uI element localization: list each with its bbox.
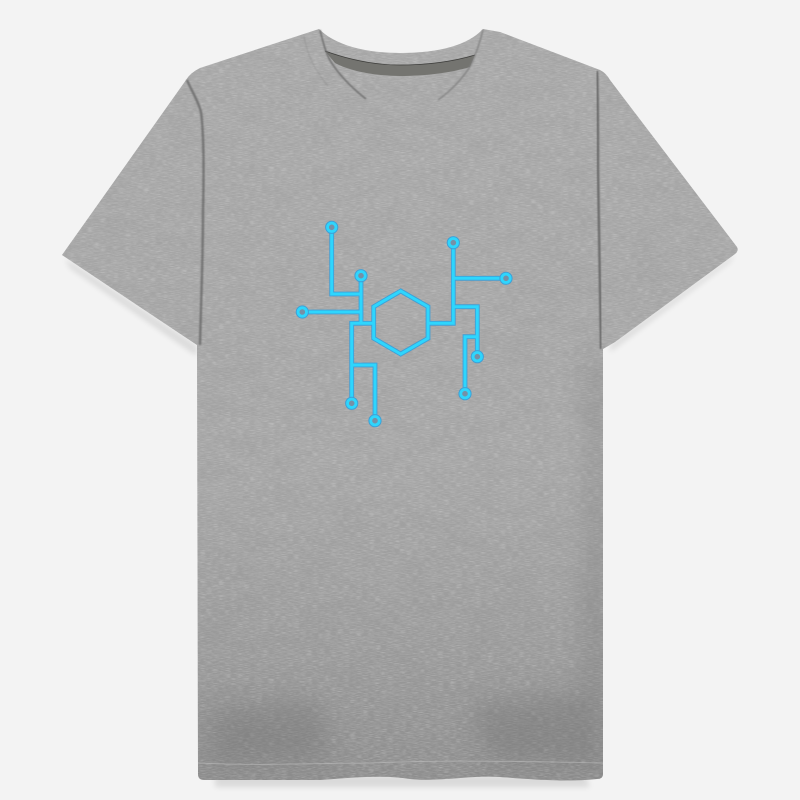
right sleeve seam xyxy=(597,71,601,349)
circuit core lines xyxy=(302,227,506,421)
inner back neck band xyxy=(325,51,475,76)
circuit print xyxy=(298,223,510,425)
hem shading xyxy=(210,360,604,770)
circuit nodes xyxy=(298,223,510,425)
left front rib line xyxy=(320,30,366,99)
right front rib line xyxy=(438,30,483,100)
collar: neck band and inner label tape xyxy=(304,30,483,100)
drop shadow under shirt xyxy=(65,254,735,787)
circuit node halos xyxy=(298,223,510,425)
outer rib shading xyxy=(304,36,328,86)
fabric heather texture xyxy=(197,43,576,460)
left sleeve seam xyxy=(187,80,204,345)
circuit outline glow xyxy=(302,227,506,421)
hem stitch line xyxy=(198,761,603,764)
